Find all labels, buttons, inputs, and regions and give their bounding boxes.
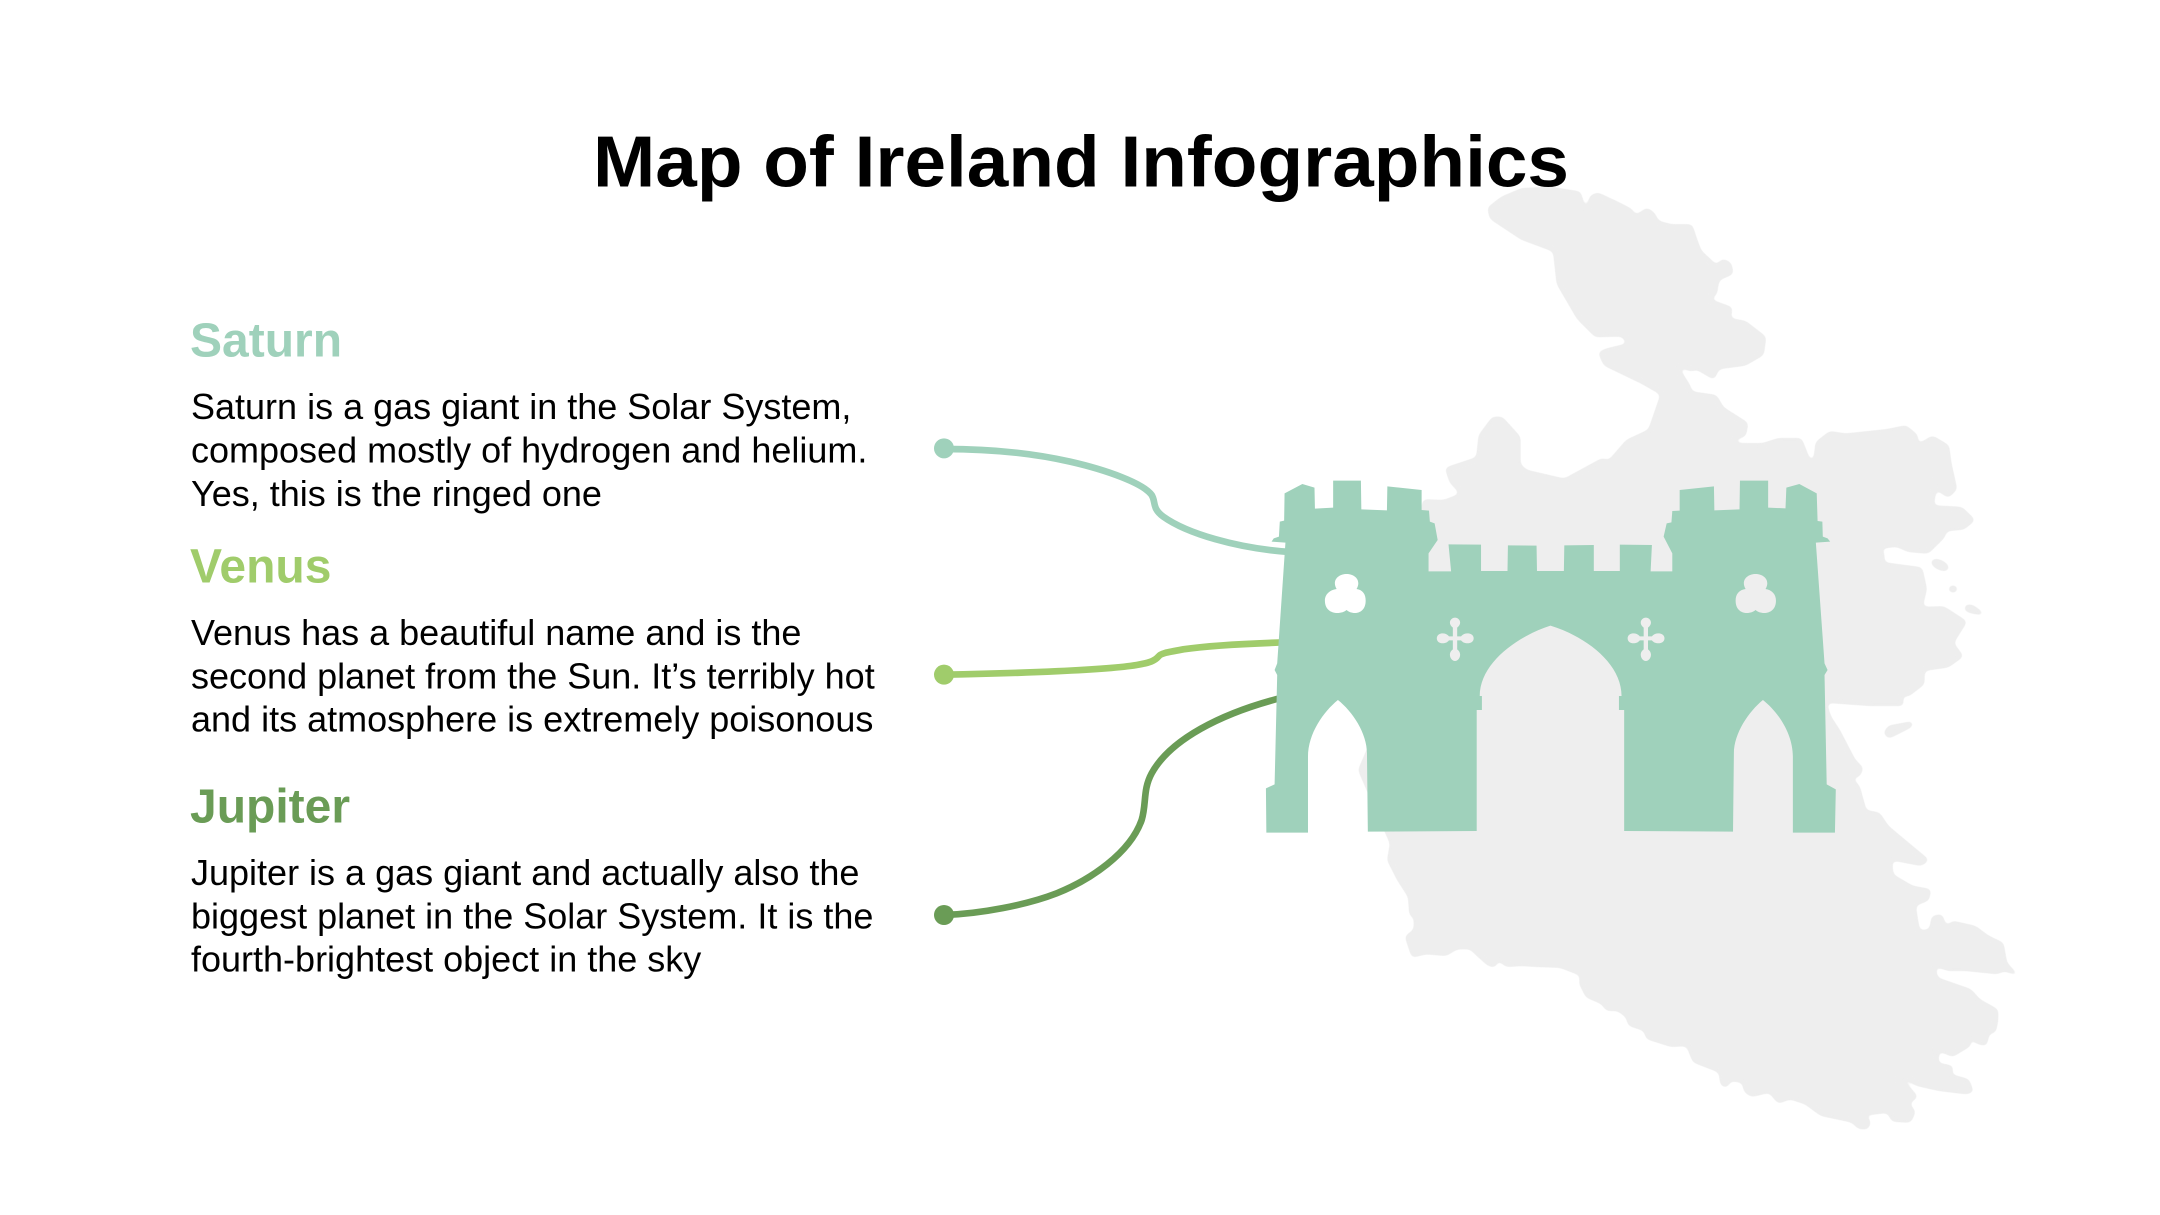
text block: Saturn: composed mostly of hydrogen and helium. [191, 430, 867, 470]
connector: Venus [934, 642, 1287, 685]
text block: Jupiter: fourth-brightest object in the sky [191, 939, 701, 980]
text block: Jupiter: Jupiter [190, 781, 350, 834]
castle gate icon [1266, 481, 1836, 833]
text block: Saturn [190, 315, 867, 514]
text block: Jupiter: Jupiter is a gas giant and actually also the [191, 852, 859, 893]
text block: Venus [190, 541, 875, 740]
text block: Jupiter: biggest planet in the Solar System. It is the [191, 895, 873, 936]
text block: Jupiter [190, 781, 873, 980]
text block: Saturn: Saturn is a gas giant in the Solar System, [191, 386, 851, 427]
text block: Venus: Venus has a beautiful name and is the [191, 612, 801, 653]
text block: Saturn: Yes, this is the ringed one [191, 473, 602, 514]
text block: Venus: and its atmosphere is extremely poisonous [191, 699, 873, 740]
text block: Venus: Venus [190, 541, 331, 594]
text block: Venus: second planet from the Sun. It’s terribly hot [191, 655, 875, 696]
connector: Jupiter [934, 697, 1283, 925]
title: Map of Ireland Infographics [593, 123, 1569, 203]
connector: Saturn [934, 438, 1290, 552]
map of Ireland silhouette [1359, 188, 2017, 1128]
text block: Saturn: Saturn [190, 315, 342, 368]
